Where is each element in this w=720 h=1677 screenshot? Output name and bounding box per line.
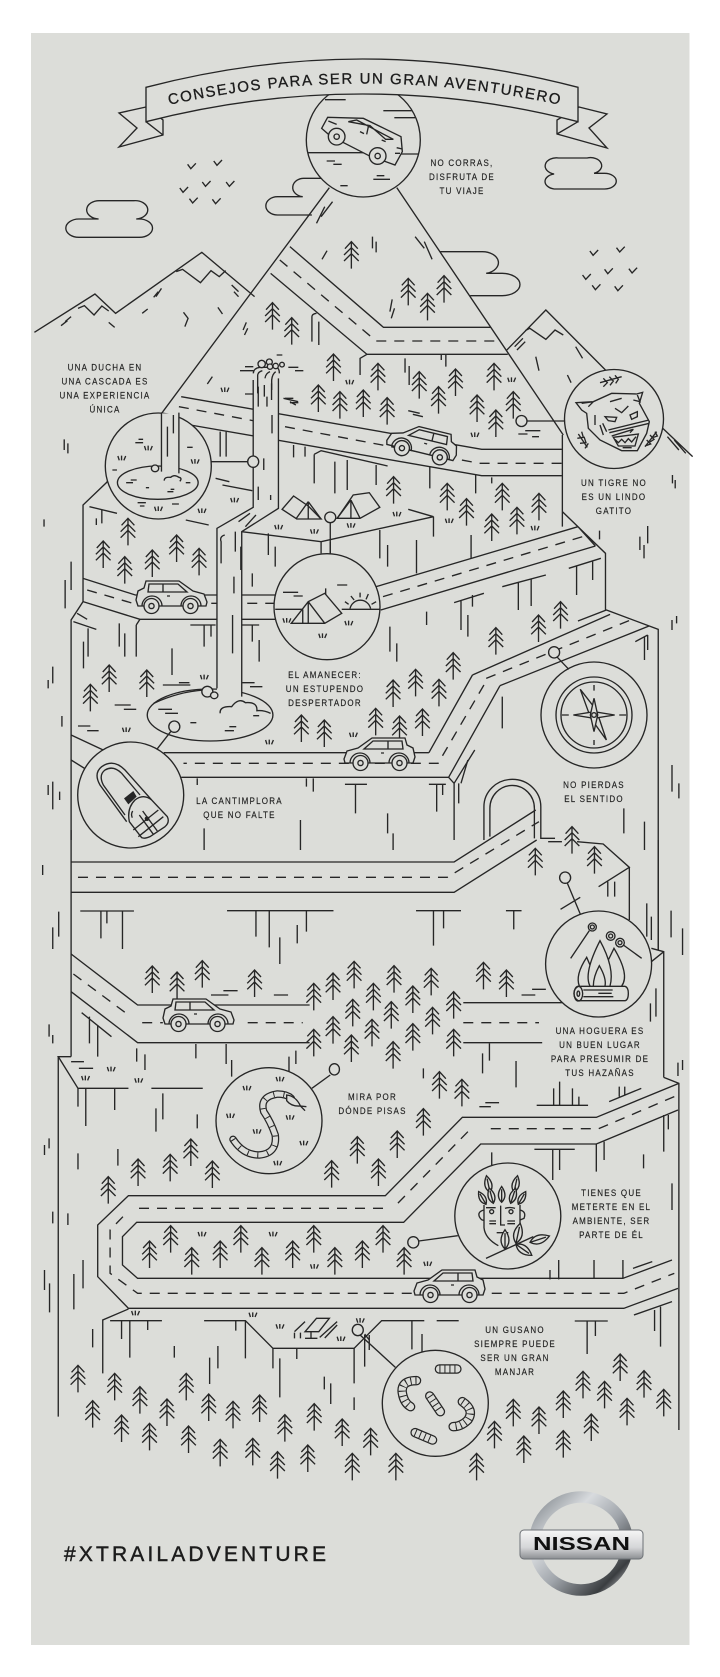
text: tigre: UN TIGRE NO	[581, 477, 647, 488]
circle: tiger	[516, 370, 664, 468]
text: ducha en cascada: UNA DUCHA EN	[68, 362, 142, 373]
text: sentido: NO PIERDAS	[563, 779, 625, 790]
text: gusano: UN GUSANO	[485, 1324, 545, 1335]
road and cliffs: middle lower section	[43, 810, 683, 1430]
text: tigre: ES UN LINDO	[582, 491, 646, 502]
text: amanecer: UN ESTUPENDO	[286, 683, 364, 694]
lower pool	[147, 689, 273, 741]
text: ducha en cascada: UNA CASCADA ES	[61, 376, 149, 387]
tree forest: all pine trees	[71, 242, 671, 1480]
circle: car on top of the peak	[306, 83, 420, 197]
text: gusano: SER UN GRAN	[480, 1352, 550, 1363]
text: no corras: TU VIAJE	[439, 185, 485, 196]
text: sentido: EL SENTIDO	[564, 793, 624, 804]
hashtag: #XTRAILADVENTURE	[64, 1543, 326, 1566]
title text: CONSEJOS PARA SER UN GRAN AVENTURERO	[168, 73, 560, 104]
circle: head with leaves	[408, 1163, 561, 1269]
text: gusano: SIEMPRE PUEDE	[474, 1338, 556, 1349]
text: ambiente: PARTE DE ÉL	[579, 1229, 644, 1240]
nissan logo	[520, 1497, 643, 1590]
waterfall	[202, 355, 303, 713]
tents on the plateau	[282, 493, 380, 542]
text: tigre: GATITO	[596, 505, 632, 516]
text: ambiente: AMBIENTE, SER	[573, 1215, 650, 1226]
circle: compass	[541, 647, 647, 768]
road and cliffs: middle upper section	[44, 397, 693, 950]
marker: tip pin on the pool	[157, 721, 180, 749]
text: ducha en cascada: ÚNICA	[89, 404, 121, 415]
circle: waterfall shower	[105, 413, 259, 519]
circle: tents at sunrise	[274, 542, 380, 660]
text: hoguera: UN BUEN LUGAR	[559, 1039, 641, 1050]
text: ducha en cascada: UNA EXPERIENCIA	[59, 390, 151, 401]
text: no corras: DISFRUTA DE	[429, 171, 495, 182]
circle: worms	[352, 1324, 488, 1456]
circle: snake	[216, 1064, 339, 1174]
landscape: clouds, birds and mountains	[34, 158, 637, 435]
text: mira por donde pisas: DÓNDE PISAS	[338, 1105, 407, 1116]
road and cliffs: bottom section	[44, 1260, 672, 1410]
logo wordmark: NISSAN	[533, 1534, 630, 1554]
circle: campfire	[546, 872, 652, 1017]
cars on the road	[136, 420, 485, 1302]
text: mira por donde pisas: MIRA POR	[348, 1091, 397, 1102]
text: cantimplora: QUE NO FALTE	[203, 809, 276, 820]
text: cantimplora: LA CANTIMPLORA	[196, 795, 283, 806]
text: ambiente: TIENES QUE	[581, 1187, 642, 1198]
banner title	[117, 58, 609, 150]
text: amanecer: EL AMANECER:	[288, 669, 362, 680]
text: hoguera: UNA HOGUERA ES	[556, 1025, 644, 1036]
text: gusano: MANJAR	[495, 1366, 535, 1377]
text: hoguera: PARA PRESUMIR DE	[551, 1053, 649, 1064]
tunnel arch	[484, 779, 555, 840]
text: no corras: NO CORRAS,	[430, 157, 494, 168]
icon: picnic table	[294, 1318, 337, 1338]
text: hoguera: TUS HAZAÑAS	[565, 1067, 635, 1078]
text: ambiente: METERTE EN EL	[572, 1201, 651, 1212]
text: amanecer: DESPERTADOR	[288, 697, 362, 708]
circle: canteen	[78, 742, 184, 848]
